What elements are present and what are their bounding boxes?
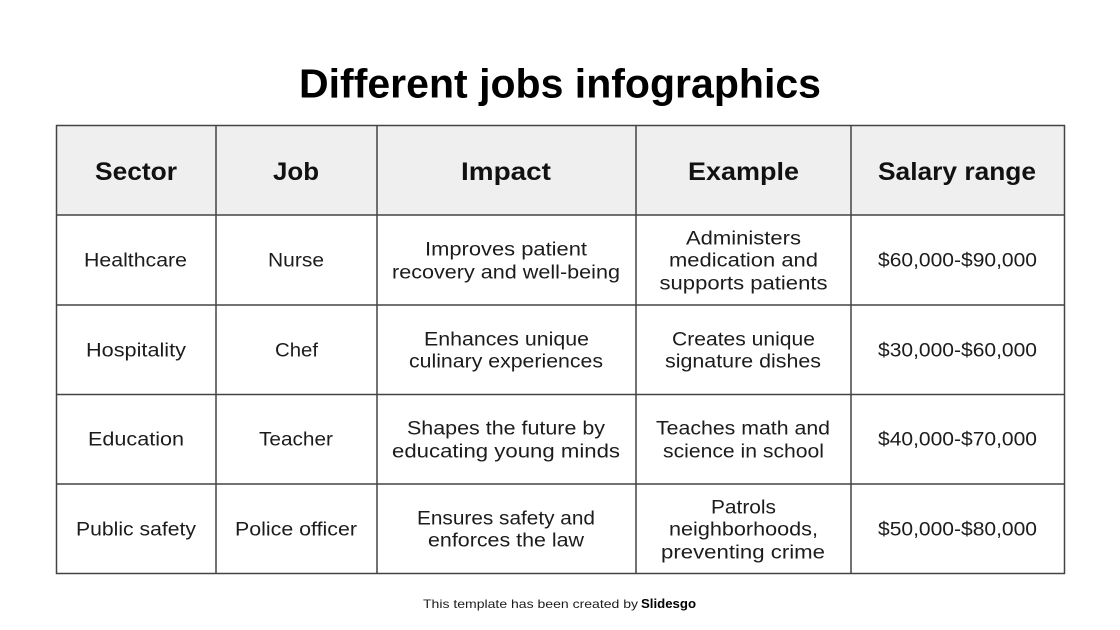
- row: hospitality: $30,000-$60,000: [878, 341, 1037, 362]
- footer credit: Slidesgo: [641, 597, 696, 611]
- row: education: [88, 419, 1037, 463]
- row: hospitality: Chef: [275, 341, 319, 362]
- row: healthcare: Improves patient: [425, 240, 588, 261]
- table: [56, 125, 1065, 574]
- row: public safety: neighborhoods,: [669, 520, 818, 541]
- row: education: science in school: [663, 442, 824, 463]
- row: public safety: Ensures safety and: [417, 509, 595, 530]
- header row: [95, 158, 1036, 186]
- row: education: Teaches math and: [656, 419, 830, 440]
- row: education: educating young minds: [392, 442, 620, 463]
- row: public safety: Police officer: [235, 520, 358, 541]
- row: healthcare: [84, 229, 1037, 295]
- row: public safety: $50,000-$80,000: [878, 520, 1037, 541]
- row: healthcare: Administers: [686, 229, 801, 250]
- row: education: Shapes the future by: [407, 419, 606, 440]
- row: public safety: enforces the law: [428, 531, 584, 552]
- row: healthcare: recovery and well-being: [392, 263, 620, 284]
- row: healthcare: $60,000-$90,000: [878, 251, 1037, 272]
- row: public safety: preventing crime: [661, 543, 825, 564]
- row: education: Education: [88, 430, 184, 451]
- row: hospitality: Hospitality: [86, 341, 187, 362]
- row: public safety: Patrols: [711, 498, 776, 519]
- row: hospitality: Creates unique: [672, 330, 815, 351]
- header row: Example: [688, 158, 799, 186]
- row: healthcare: supports patients: [660, 274, 828, 295]
- row: hospitality: [86, 330, 1037, 373]
- row: education: Teacher: [259, 430, 334, 451]
- row: healthcare: Nurse: [268, 251, 324, 272]
- row: healthcare: medication and: [669, 251, 818, 272]
- header row: Salary range: [878, 158, 1036, 186]
- row: public safety: Public safety: [76, 520, 197, 541]
- title: Different jobs infographics: [299, 60, 821, 106]
- row: hospitality: Enhances unique: [424, 330, 589, 351]
- row: education: $40,000-$70,000: [878, 430, 1037, 451]
- header row: Impact: [461, 158, 552, 186]
- table header background: [56, 125, 1065, 215]
- row: healthcare: Healthcare: [84, 251, 187, 272]
- row: hospitality: signature dishes: [665, 352, 821, 373]
- header row: Job: [273, 158, 319, 186]
- header row: Sector: [95, 158, 177, 186]
- footer credit: [423, 597, 696, 611]
- row: public safety: [76, 498, 1037, 564]
- row: hospitality: culinary experiences: [409, 352, 603, 373]
- footer credit: This template has been created by: [423, 597, 638, 611]
